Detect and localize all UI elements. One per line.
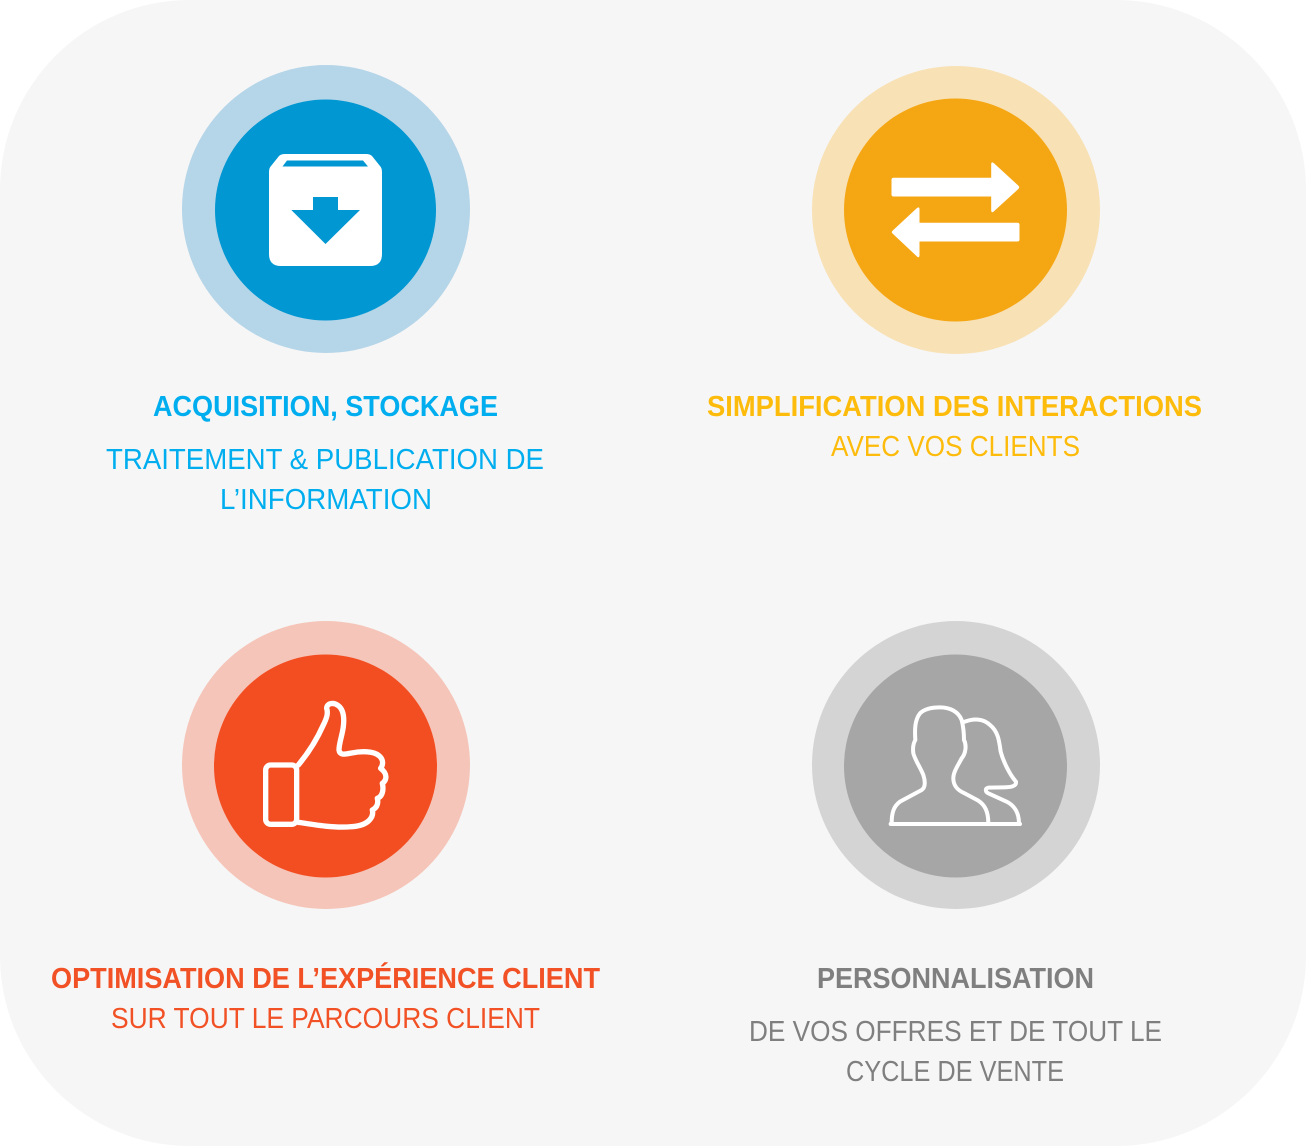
panel: simplification: [707, 66, 1202, 463]
text: acquisition detail: TRAITEMENT & PUBLICATION DE: [106, 444, 544, 476]
icon: archive box with down arrow: [182, 65, 470, 353]
text: personnalisation detail: CYCLE DE VENTE: [846, 1056, 1064, 1088]
panel: personnalisation: [749, 621, 1162, 1088]
icon: two people outlines: [812, 621, 1100, 909]
heading: personnalisation: PERSONNALISATION: [817, 963, 1094, 995]
text: simplification detail: AVEC VOS CLIENTS: [831, 431, 1080, 463]
text: optimisation detail: SUR TOUT LE PARCOURS CLIENT: [111, 1003, 540, 1035]
text: personnalisation detail: DE VOS OFFRES ET DE TOUT LE: [749, 1016, 1162, 1048]
panel: optimisation: [51, 621, 600, 1035]
heading: optimisation: OPTIMISATION DE L’EXPÉRIENCE CLIENT: [51, 962, 600, 995]
panel: acquisition: [106, 65, 544, 516]
text: personnalisation detail: [749, 1016, 1162, 1088]
text: acquisition detail: [106, 444, 544, 516]
text: acquisition detail: L’INFORMATION: [220, 484, 432, 516]
heading: acquisition: ACQUISITION, STOCKAGE: [153, 391, 498, 423]
icon: thumbs up: [182, 621, 470, 909]
icon: two opposing arrows: [812, 66, 1100, 354]
heading: simplification: SIMPLIFICATION DES INTERACTIONS: [707, 391, 1202, 423]
